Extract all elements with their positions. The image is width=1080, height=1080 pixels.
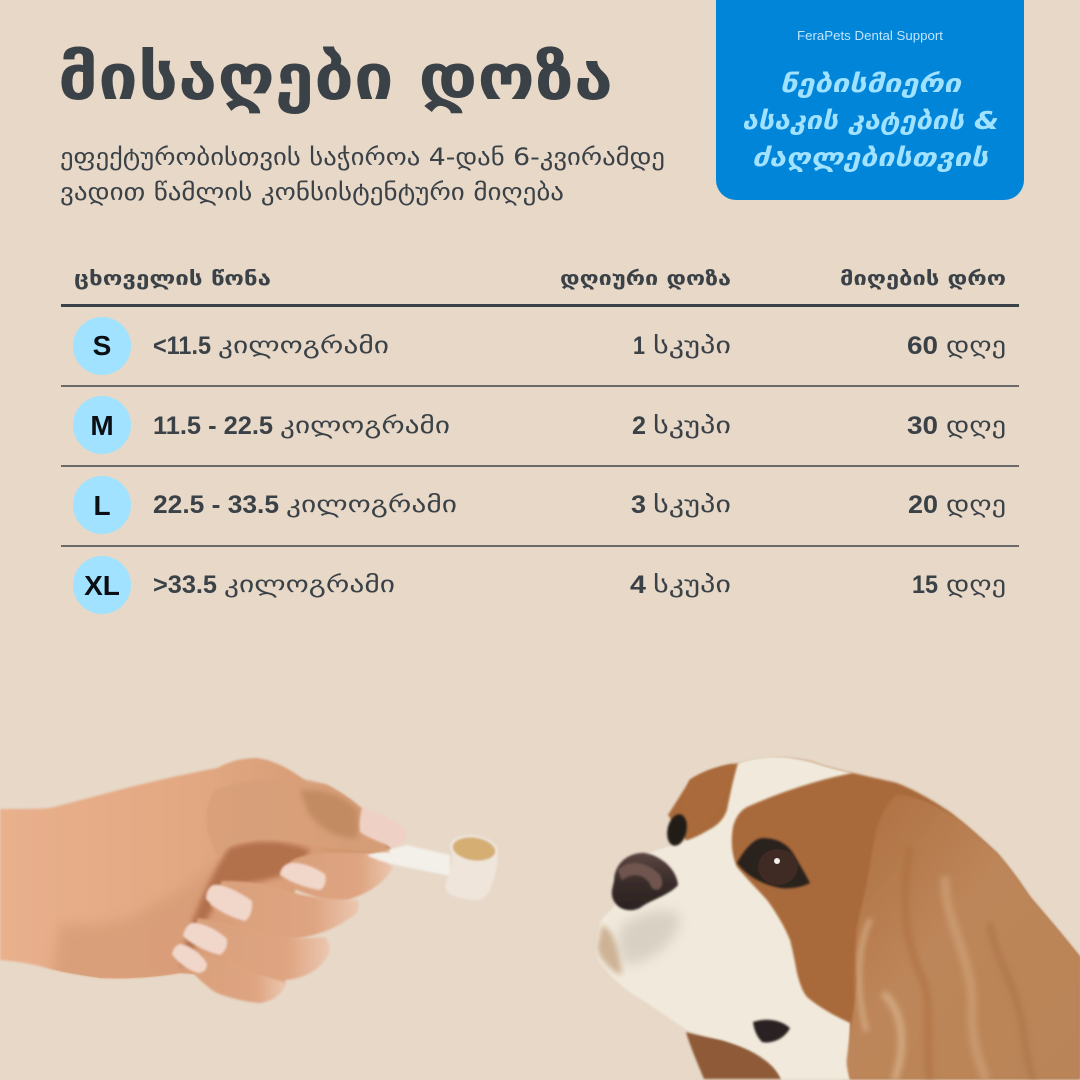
row: M [61,396,1019,467]
row: S: 1 [633,332,645,360]
row: L: 3 [631,491,646,519]
badge heading: ასაკის კატების & [742,106,999,135]
subtitle [60,143,665,206]
mouth corner [753,1020,790,1042]
thumb knuckle shading [300,790,358,838]
row: XL: XL [84,570,120,601]
table header [61,266,1019,307]
ear [847,795,1080,1079]
muzzle tan edge [597,925,622,975]
subtitle: ეფექტურობისთვის საჭიროა 4-დან 6-კვირამდე [60,143,665,171]
row: M: M [90,410,114,441]
title: მისაღები დოზა [58,41,613,115]
table header: მიღების დრო [840,266,1006,290]
row: M: დღე [946,413,1006,439]
scoop cup [445,852,498,900]
row: M: 30 [907,412,938,440]
index finger [285,853,393,902]
illustration: hand holding scoop [0,758,500,1003]
scoop powder [451,835,497,863]
row: S: კილოგრამი [218,333,389,359]
row: L [61,476,1019,547]
hand palm [0,758,392,985]
row: S: დღე [946,333,1006,359]
row: L: 20 [908,491,938,519]
index nail [280,863,326,890]
row: S: <11.5 [153,332,211,360]
row: XL: კილოგრამი [224,572,395,598]
badge heading: ნებისმიერი [780,69,963,98]
row: XL: 15 [912,571,938,599]
row: XL: დღე [946,572,1006,598]
row: M: კილოგრამი [280,413,450,439]
panel: dosage table [61,266,1019,614]
subtitle: ვადით წამლის კონსისტენტური მიღება [60,178,564,206]
shadow between palm and fingers [180,841,310,970]
muzzle shadow [618,910,680,965]
chest fur [686,1032,781,1079]
row: S: S [93,330,111,361]
panel: audience badge [716,0,1024,200]
row: M: 11.5 - 22.5 [153,412,273,440]
scoop handle [367,845,450,876]
row: L: დღე [946,492,1006,518]
middle finger [210,881,358,940]
brown head and ear base [668,757,1080,1079]
near eye [737,838,810,888]
row: L: კილოგრამი [286,492,457,518]
row: L: 22.5 - 33.5 [153,491,279,519]
row: XL [73,556,1006,614]
row: M: სკუპი [653,413,731,439]
row: S [61,317,1019,387]
middle nail [206,885,252,921]
thumb [206,778,390,860]
lower palm shading [48,882,222,978]
table header: ცხოველის წონა [74,266,271,290]
ring finger [190,918,329,980]
badge heading [742,69,999,172]
scoop [367,832,500,900]
table header: დღიური დოზა [560,266,731,290]
ring nail [183,923,227,955]
nose [612,853,678,910]
badge brand label: FeraPets Dental Support [797,28,943,43]
little nail [172,944,207,973]
row: S: სკუპი [653,333,731,359]
row: L: L [93,490,111,521]
row: L: სკუპი [653,492,731,518]
row: XL: >33.5 [153,571,217,599]
ear locks [859,850,1033,1078]
row: M: 2 [632,412,646,440]
row: S: 60 [907,332,938,360]
illustration: dog [595,756,1080,1079]
far brow brown patch [685,764,733,833]
row: XL: სკუპი [653,572,731,598]
little finger [190,953,285,1003]
far eye [664,812,690,848]
badge heading: ძაღლებისთვის [752,143,989,172]
thumb nail [360,808,406,847]
white blaze and muzzle [595,756,853,1079]
row: XL: 4 [630,571,646,599]
